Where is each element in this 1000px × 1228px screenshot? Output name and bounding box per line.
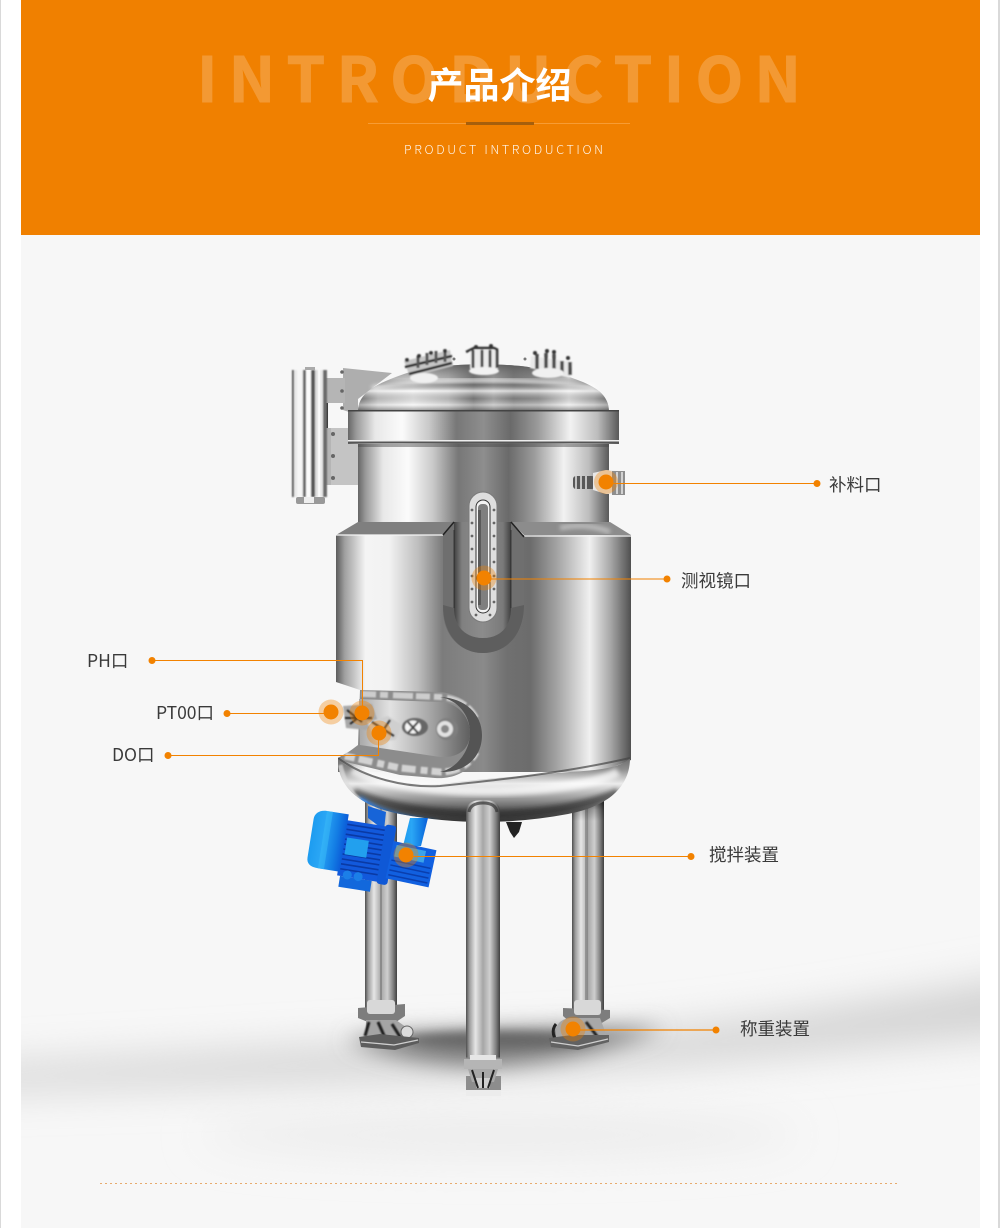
callout: 搅拌装置: 搅拌装置 — [709, 842, 779, 867]
instrument ports — [343, 704, 458, 742]
end cap — [306, 809, 349, 872]
left foot — [358, 1000, 419, 1050]
drain valve — [506, 822, 522, 838]
callout: PT00口: PT00口 — [156, 700, 214, 725]
center nozzle — [466, 344, 499, 375]
PH and PT00 fittings — [343, 704, 378, 730]
background panel — [21, 235, 980, 1228]
callout: 测视镜口: 测视镜口 — [681, 568, 751, 593]
blue reflection — [358, 794, 438, 820]
title: 产品介绍 — [427, 57, 572, 109]
terminal box — [344, 837, 369, 858]
title rule — [368, 122, 630, 125]
callout: PT00口 — [156, 700, 344, 725]
dotted divider — [100, 1182, 900, 1184]
jacket top bevels — [336, 522, 631, 536]
callout: DO口: DO口 — [112, 742, 155, 767]
upper vessel body — [358, 440, 609, 526]
front leg — [466, 800, 500, 1058]
DO fitting — [367, 716, 402, 742]
jacket — [330, 492, 631, 778]
callout: 补料口: 补料口 — [829, 472, 882, 497]
flange — [376, 824, 397, 885]
gearbox — [386, 841, 436, 887]
callout: PH口: PH口 — [87, 648, 128, 673]
feed port — [573, 470, 625, 495]
motor body — [337, 820, 395, 883]
subtitle: PRODUCT INTRODUCTION — [404, 139, 603, 158]
port recess rim — [338, 690, 483, 778]
upper hinge plate — [343, 368, 392, 412]
left leg — [365, 800, 397, 1012]
jacket shell — [336, 535, 631, 772]
clamp ring — [348, 410, 619, 447]
callout: 称重装置: 称重装置 — [740, 1016, 810, 1041]
motor shaft support — [403, 818, 428, 846]
right leg — [572, 800, 604, 1012]
motor foot — [338, 876, 372, 892]
dome — [358, 364, 609, 412]
sight glass — [469, 492, 497, 622]
right foot — [549, 1000, 610, 1050]
tank assembly — [292, 344, 631, 1096]
hinge column — [292, 370, 327, 497]
bottom dish — [338, 758, 630, 838]
dome nozzles — [404, 344, 573, 383]
motor housing — [304, 809, 397, 894]
port recess inner plate — [359, 699, 470, 757]
floor shadow — [21, 968, 980, 1104]
hinge arm — [292, 367, 392, 504]
header band — [21, 0, 980, 235]
side cut-out background — [330, 680, 360, 774]
left nozzle — [404, 349, 453, 383]
callout: DO口 — [112, 720, 392, 767]
right nozzle — [530, 349, 573, 378]
lower hinge plate — [322, 428, 358, 485]
callout: 称重装置 — [560, 1016, 810, 1042]
callout: 搅拌装置 — [394, 842, 779, 868]
front foot — [464, 1055, 502, 1096]
middle fitting — [402, 718, 428, 736]
U recess — [443, 522, 524, 653]
right fitting — [436, 718, 458, 740]
callout: 补料口 — [594, 470, 882, 497]
motor — [304, 806, 436, 894]
rear legs — [365, 800, 604, 1012]
callout: 测视镜口 — [472, 566, 751, 593]
callout: PH口 — [87, 648, 374, 726]
background word INTRODUCTION: INTRODUCTION — [197, 30, 801, 120]
